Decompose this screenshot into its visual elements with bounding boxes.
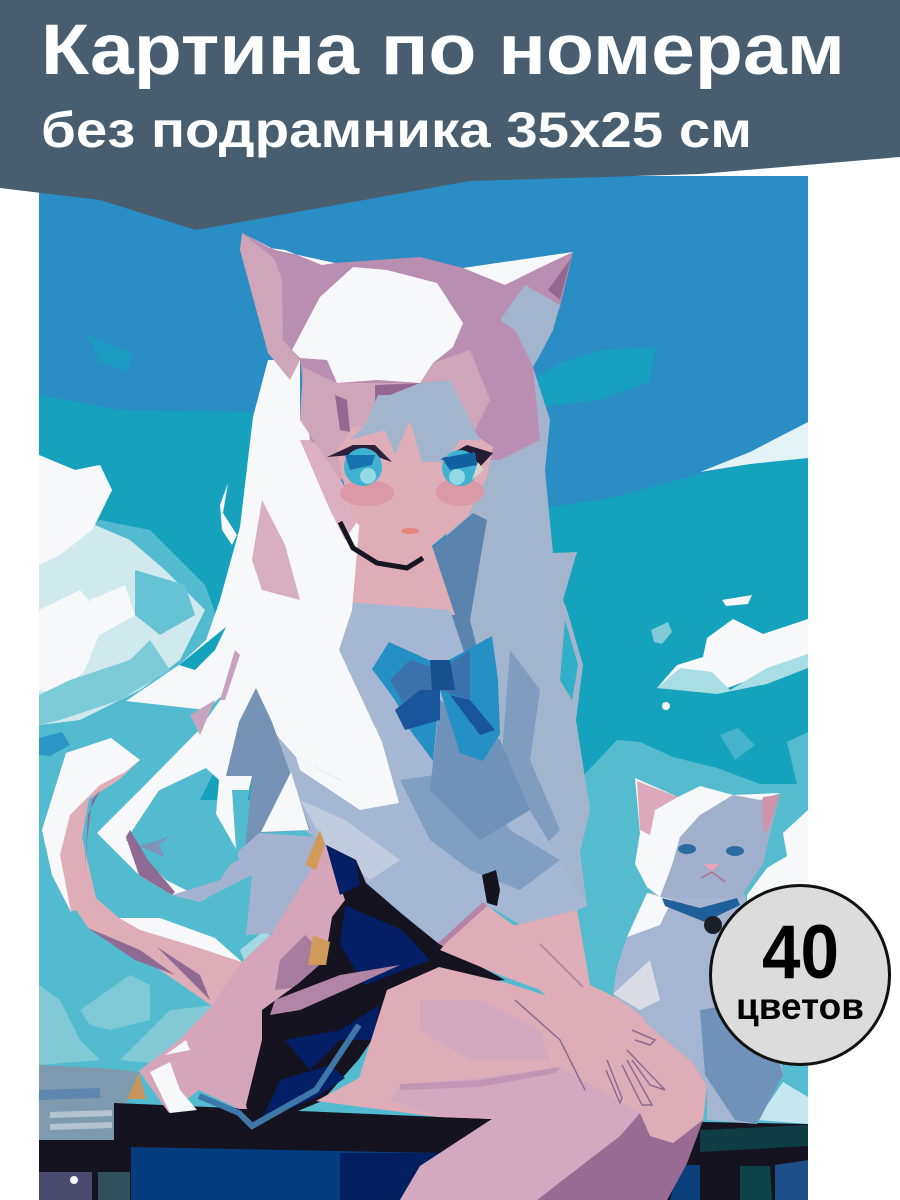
sky background <box>39 176 808 800</box>
bow <box>372 636 500 761</box>
face <box>337 420 493 553</box>
badge: 40 colors <box>710 886 890 1064</box>
dark skirt <box>246 845 505 1130</box>
hair: right long blue-grey <box>427 367 590 910</box>
bench <box>39 1103 808 1200</box>
body pink <box>139 845 350 1113</box>
hair: left long white <box>97 360 399 935</box>
clouds: left big <box>39 455 240 800</box>
neck <box>352 525 455 615</box>
leg <box>316 967 707 1200</box>
clouds: lower left sky <box>39 800 600 1130</box>
subtitle: без подрамника 35х25 см <box>41 102 752 158</box>
head <box>240 233 573 568</box>
ground band <box>39 1065 140 1140</box>
bangs <box>350 380 480 462</box>
title: Картина по номерам <box>41 10 845 90</box>
cat body <box>613 893 783 1124</box>
choker <box>340 522 423 568</box>
top banner <box>0 0 900 230</box>
cat <box>613 778 783 1124</box>
orange and white feet <box>127 1073 146 1099</box>
arm and hand <box>440 906 665 1109</box>
badge: 40 colors: цветов <box>736 986 864 1027</box>
eyes <box>327 445 392 462</box>
tail <box>42 738 242 1006</box>
hem stripe <box>199 1025 359 1126</box>
ears and hair top <box>242 233 573 460</box>
shirt <box>260 600 587 948</box>
painting: anime cat girl <box>39 176 808 1200</box>
cat head <box>635 778 780 898</box>
forehead pink <box>300 350 490 480</box>
white dome <box>292 267 463 383</box>
badge: 40 colors: 40 <box>762 910 839 995</box>
skirt and body <box>127 830 505 1130</box>
clouds: right <box>583 595 808 1124</box>
